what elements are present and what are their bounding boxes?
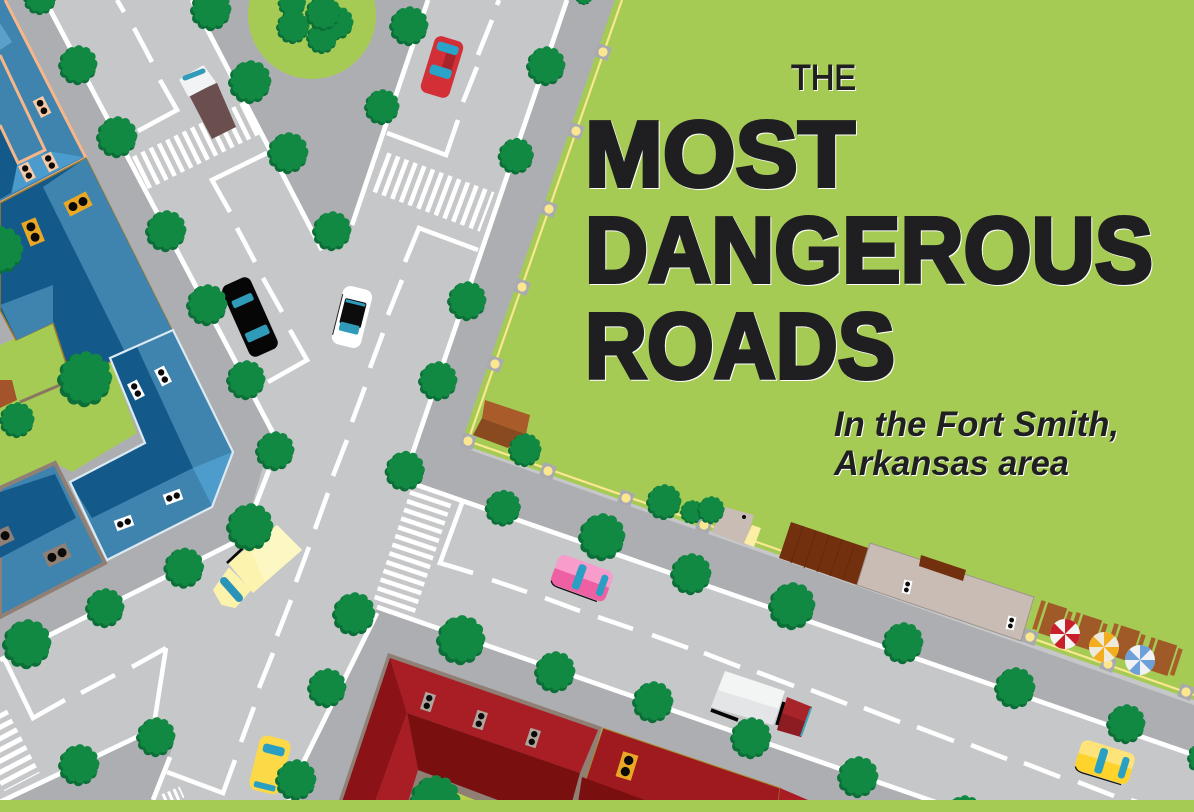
crosswalks <box>0 118 487 800</box>
title: MOST <box>585 102 855 206</box>
building: blue with grey trim <box>0 463 105 617</box>
title: THE <box>791 58 856 98</box>
building: red hip roof <box>338 653 602 803</box>
building: red with yellow trim <box>578 728 815 803</box>
building: blue with brown trim <box>0 158 172 382</box>
vehicle: yellow car bottom <box>248 734 292 796</box>
trees in traffic circle <box>276 0 354 54</box>
vehicle: yellow car right <box>1073 739 1136 786</box>
small tan kiosk <box>711 507 761 547</box>
title: ROADS <box>585 294 895 398</box>
lawn <box>464 0 1194 700</box>
vehicle: white car <box>330 284 374 350</box>
subtitle <box>833 405 1119 483</box>
bottom band <box>0 800 1194 812</box>
tan building <box>857 543 1034 641</box>
building: peach outlined blue <box>0 0 86 203</box>
building: L-shaped blue with white trim <box>70 330 233 560</box>
brown deck at lawn corner <box>473 400 530 448</box>
vehicle: yellow box truck <box>214 525 302 607</box>
vehicle: white truck with red cab <box>711 671 812 737</box>
fence with lamps <box>459 0 1194 701</box>
subtitle: In the Fort Smith, <box>834 405 1119 444</box>
vehicle: red car <box>419 34 465 100</box>
wooden deck <box>779 522 868 585</box>
traffic circle island <box>248 0 376 79</box>
title <box>585 58 1153 398</box>
subtitle: Arkansas area <box>833 444 1069 483</box>
vehicle: brown truck <box>181 67 236 139</box>
vehicle: pink car <box>549 553 615 604</box>
picnic tables and umbrellas <box>1032 600 1183 678</box>
title: DANGEROUS <box>585 198 1153 302</box>
courtyard lawn <box>0 322 137 488</box>
vehicle: black car <box>220 275 280 359</box>
